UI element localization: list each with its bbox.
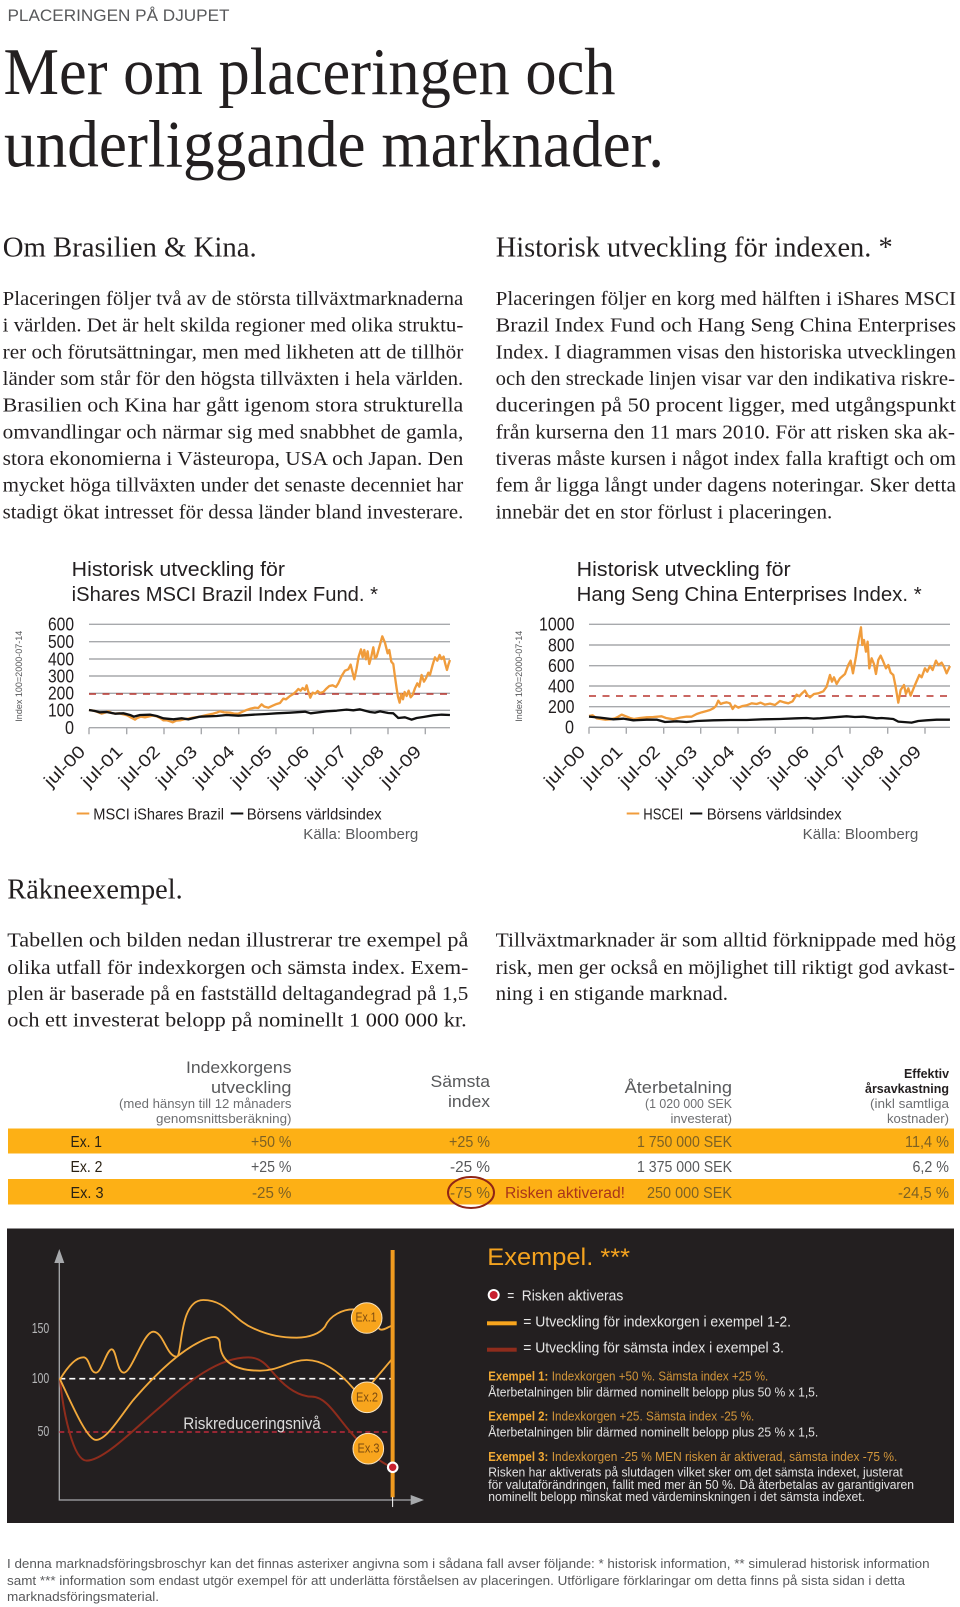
table header: Återbetalning: Återbetalning	[625, 1078, 732, 1097]
line chart: example curves	[32, 1249, 424, 1507]
y axis labels: Brazil: 500	[48, 632, 74, 652]
x axis labels: HSCEI: jul-03	[651, 741, 701, 792]
x axis labels: Brazil: jul-08	[338, 741, 388, 792]
heading: Om Brasilien & Kina: Om Brasilien & Kina.	[3, 232, 257, 264]
curves and end-of-term bar	[60, 1250, 395, 1507]
table header: Indexkorgens utveckling: (med hänsyn till 12 månaders	[119, 1097, 292, 1111]
table row: Ex. 2: Ex. 2	[70, 1159, 102, 1176]
text block: Historisk utveckling: Brazil Index Fund och Hang Seng China Enterprises	[496, 315, 956, 337]
table row: Ex. 1	[8, 1128, 954, 1154]
marker: Ex.2: Ex.2	[356, 1390, 378, 1405]
y axis labels: Brazil: 300	[48, 666, 74, 686]
marker: Ex.1	[351, 1303, 382, 1333]
kicker: PLACERINGEN PÅ DJUPET	[8, 6, 230, 25]
table header: Indexkorgens utveckling: genomsnittsberäkning)	[156, 1112, 292, 1126]
axis note: HSCEI: Index 100=2000-07-14	[514, 631, 524, 722]
x axis labels: HSCEI: jul-04	[688, 741, 739, 792]
text block: Om Brasilien & Kina: mycket höga tillväxten under det senaste decenniet har	[3, 475, 463, 497]
chart heading: HSCEI	[577, 559, 922, 606]
table header: Effektiv årsavkastning	[865, 1067, 949, 1126]
marker: Ex.1: Ex.1	[356, 1310, 376, 1325]
x axis labels: Brazil: jul-06	[263, 741, 313, 792]
table row: Ex. 2: 1 375 000 SEK	[637, 1159, 733, 1176]
table row: Ex. 3: Ex. 3	[70, 1185, 104, 1202]
text block: Exempel 1	[488, 1369, 818, 1400]
text block: Exempel 1: Återbetalningen blir därmed nominellt belopp plus 50 % x 1,5.	[488, 1385, 818, 1400]
title	[4, 35, 664, 182]
table row: Ex. 2	[70, 1159, 949, 1176]
risk reduction level line	[59, 1431, 391, 1433]
table header: Indexkorgens utveckling: Indexkorgens	[186, 1059, 292, 1077]
text block: Tillväxtmarknader	[496, 930, 956, 1005]
text block: Exempel 1: Exempel 1:	[488, 1369, 548, 1384]
line series: Börsens världsindex, HSCEI chart	[589, 716, 950, 723]
text block: Historisk utveckling: duceringen på 50 procent ligger, med utgångspunkt	[496, 395, 956, 417]
y axis labels: HSCEI: 0	[565, 718, 574, 738]
text block: Räkneexempel: plen är baserade på en fastställd deltagandegrad på 1,5	[7, 983, 468, 1005]
legend: Brazil	[77, 806, 382, 823]
line series: Börsens världsindex, Brazil chart	[89, 709, 450, 720]
x axis labels: HSCEI: jul-02	[614, 741, 664, 792]
footnote: samt *** information som endast utgör exempel för att underlätta förståelsen av placeringen. Utförligare förklaringar om detta finns på sista sidan i detta	[7, 1573, 906, 1588]
y axis labels: 150	[32, 1320, 49, 1337]
text block: Om Brasilien & Kina: Brasilien och Kina har gått igenom stora strukturella	[3, 395, 463, 417]
chart heading: Brazil	[72, 559, 378, 606]
x axis labels: HSCEI: jul-08	[838, 741, 888, 792]
text block: Räkneexempel	[7, 930, 468, 1032]
legend: risk activated: =	[507, 1288, 514, 1304]
marker: Ex.3: Ex.3	[358, 1441, 380, 1456]
text block: Historisk utveckling: från kurserna den 11 mars 2010. För att risken ska ak-	[496, 421, 955, 443]
table row: Ex. 2: 6,2 %	[912, 1159, 949, 1176]
text block: Tillväxtmarknader: Tillväxtmarknader är som alltid förknippade med hög	[496, 930, 956, 952]
text block: Exempel 3: Exempel 3:	[488, 1449, 548, 1464]
table row: Ex. 3: -75 %	[450, 1185, 490, 1202]
text block: Om Brasilien & Kina: stadigt ökat intresset för dessa länder bland investerare.	[3, 501, 463, 523]
text block: Exempel 3	[488, 1449, 914, 1504]
text block: Exempel 2: Återbetalningen blir därmed nominellt belopp plus 25 % x 1,5.	[488, 1425, 818, 1440]
table header: Återbetalning: (1 020 000 SEK	[645, 1097, 733, 1111]
chart: iShares MSCI Brazil	[14, 559, 450, 843]
table row: Ex. 3: Risken aktiverad!	[505, 1185, 625, 1202]
table row: Ex. 3: -25 %	[252, 1185, 292, 1202]
marker: Ex.2	[352, 1382, 382, 1413]
title: Mer om placeringen och	[4, 35, 616, 109]
y axis labels: 50	[38, 1423, 49, 1440]
footnote: I denna marknadsföringsbroschyr kan det finnas asterixer angivna som i sådana fall avser följande: * historisk information, ** simulerad historisk information	[7, 1556, 930, 1571]
text block: Exempel 3: Indexkorgen -25 % MEN risken är aktiverad, sämsta index -75 %.	[552, 1449, 897, 1464]
table row: Ex. 3: 250 000 SEK	[647, 1185, 733, 1202]
chart heading: Brazil: iShares MSCI Brazil Index Fund. *	[72, 584, 378, 606]
y axis labels: HSCEI: 200	[548, 697, 574, 717]
y axis labels: HSCEI: 400	[548, 676, 574, 696]
text block: Räkneexempel: olika utfall för indexkorgen och sämsta index. Exem-	[7, 957, 468, 979]
text block: Tillväxtmarknader: ning i en stigande marknad.	[496, 983, 728, 1005]
y axis labels: HSCEI	[539, 615, 574, 738]
table header: Sämsta index: index	[448, 1093, 491, 1111]
reduction level line: HSCEI	[589, 695, 950, 697]
heading: Räkneexempel: Räkneexempel.	[7, 873, 183, 905]
table row: Ex. 1: +50 %	[251, 1134, 292, 1151]
table header: Återbetalning: investerat)	[670, 1112, 732, 1126]
legend: Brazil: MSCI iShares Brazil	[93, 806, 224, 823]
text block: Om Brasilien & Kina: rer och förutsättningar, men med likheten att de tillhör	[3, 341, 463, 363]
table: examples	[8, 1059, 954, 1208]
chart: Hang Seng China Enterprises	[514, 559, 950, 843]
text block: Räkneexempel: Tabellen och bilden nedan illustrerar tre exempel på	[7, 930, 468, 952]
table row: Ex. 1: Ex. 1	[70, 1134, 102, 1151]
footnote	[7, 1556, 930, 1604]
y axis labels: Brazil	[48, 615, 74, 738]
legend: risk activated	[488, 1288, 623, 1305]
text block: Exempel 1: Indexkorgen +50 %. Sämsta index +25 %.	[552, 1369, 768, 1384]
x axis labels: Brazil	[39, 741, 425, 792]
heading: Historisk utveckling för indexen: Historisk utveckling för indexen. *	[496, 232, 893, 264]
text block: Tillväxtmarknader: risk, men ger också en möjlighet till riktigt god avkast-	[496, 957, 955, 979]
text block: Exempel 2	[488, 1409, 818, 1440]
table header: Effektiv årsavkastning: (inkl samtliga	[870, 1097, 949, 1111]
source: HSCEI: Källa: Bloomberg	[803, 826, 918, 843]
x axis labels: HSCEI: jul-01	[576, 741, 626, 792]
panel: Exempel	[7, 1228, 954, 1523]
table header: Effektiv årsavkastning: kostnader)	[887, 1112, 949, 1126]
axis note: Brazil: Index 100=2000-07-14	[14, 631, 24, 722]
text block: Om Brasilien & Kina: stora ekonomierna i Västeuropa, USA och Japan. Den	[3, 448, 463, 470]
y axis labels: 100	[32, 1370, 49, 1387]
x axis labels: Brazil: jul-04	[188, 741, 239, 792]
legend: HSCEI: Börsens världsindex	[707, 806, 842, 823]
axes	[54, 1249, 424, 1505]
x axis labels: HSCEI: jul-07	[800, 741, 850, 792]
legend: index basket: = Utveckling för indexkorgen i exempel 1-2.	[523, 1314, 791, 1331]
y axis labels: Brazil: 600	[48, 615, 74, 635]
text block: Exempel 3: för valutaförändringen, fallit med mer än 50 %. Då återbetalas av garantigivaren	[488, 1478, 914, 1492]
chart heading: HSCEI: Hang Seng China Enterprises Index. *	[577, 584, 922, 606]
line series: MSCI iShares Brazil	[89, 636, 450, 722]
x axis labels: Brazil: jul-00	[39, 741, 89, 792]
text block: Historisk utveckling: fem år ligga långt under dagens noteringar. Sker detta	[496, 475, 956, 497]
footnote: marknadsföringsmaterial.	[7, 1589, 159, 1604]
y axis labels: HSCEI: 600	[548, 656, 574, 676]
chart heading: HSCEI: Historisk utveckling för	[577, 559, 791, 581]
line series: HSCEI	[589, 627, 950, 720]
table header: Återbetalning	[625, 1078, 733, 1126]
text block: Exempel 3: nominellt belopp minskat med värdeminskningen i det sämsta indexet.	[488, 1490, 865, 1504]
source: Brazil: Källa: Bloomberg	[303, 826, 418, 843]
legend: HSCEI	[627, 806, 842, 823]
table header: Effektiv årsavkastning: årsavkastning	[865, 1082, 949, 1096]
text block: Exempel 2: Exempel 2:	[488, 1409, 548, 1424]
legend: risk activated: Risken aktiveras	[522, 1288, 623, 1305]
start level line	[59, 1378, 391, 1380]
text block: Om Brasilien & Kina: i världen. Det är helt skilda regioner med olika struktu-	[3, 315, 463, 337]
text block: Räkneexempel: och ett investerat belopp på nominellt 1 000 000 kr.	[7, 1010, 467, 1032]
y axis labels: Brazil: 0	[65, 718, 74, 738]
x axis labels: Brazil: jul-01	[76, 741, 126, 792]
x axis labels: HSCEI: jul-09	[875, 741, 925, 792]
reduction level line: Brazil	[89, 693, 450, 695]
text block: Om Brasilien & Kina	[3, 288, 463, 523]
x axis labels: Brazil: jul-07	[300, 741, 350, 792]
y axis labels: Brazil: 100	[48, 701, 74, 721]
label: Riskreduceringsnivå: Riskreduceringsnivå	[183, 1414, 321, 1433]
chart heading: Brazil: Historisk utveckling för	[72, 559, 285, 581]
table row: Ex. 2: -25 %	[450, 1159, 490, 1176]
table header: Effektiv årsavkastning: Effektiv	[904, 1067, 949, 1081]
table row: Ex. 1: 1 750 000 SEK	[637, 1134, 733, 1151]
table row: Ex. 3: -24,5 %	[898, 1185, 949, 1202]
y axis labels: HSCEI: 800	[548, 635, 574, 655]
y axis labels: HSCEI: 1000	[539, 615, 574, 635]
text block: Historisk utveckling: Placeringen följer en korg med hälften i iShares MSCI	[496, 288, 956, 310]
x axis labels: Brazil: jul-09	[375, 741, 425, 792]
table header: Indexkorgens utveckling: utveckling	[211, 1079, 292, 1097]
table header: Sämsta index: Sämsta	[430, 1073, 491, 1091]
text block: Om Brasilien & Kina: Placeringen följer två av de största tillväxtmarknaderna	[3, 288, 463, 310]
table row: Ex. 1: +25 %	[449, 1134, 490, 1151]
x axis labels: HSCEI: jul-00	[539, 741, 589, 792]
table header: Sämsta index	[430, 1073, 491, 1111]
table header: Indexkorgens utveckling	[119, 1059, 292, 1126]
text block: Historisk utveckling: innebär det en stor förlust i placeringen.	[496, 501, 832, 523]
legend: Brazil: Börsens världsindex	[247, 806, 382, 823]
text block: Historisk utveckling: tiveras måste kursen i något index falla kraftigt och om	[496, 448, 956, 470]
marker: risk activated	[387, 1462, 399, 1473]
legend: worst index: = Utveckling för sämsta index i exempel 3.	[523, 1339, 784, 1356]
table row: Ex. 2: +25 %	[251, 1159, 292, 1176]
title: underliggande marknader.	[4, 108, 664, 182]
legend: HSCEI: HSCEI	[643, 806, 683, 823]
text block: Exempel 2: Indexkorgen +25. Sämsta index -25 %.	[552, 1409, 754, 1424]
x axis labels: Brazil: jul-03	[151, 741, 201, 792]
text block: Om Brasilien & Kina: länder som står för den högsta tillväxten i hela världen.	[3, 368, 463, 390]
text block: Exempel 3: Risken har aktiverats på slutdagen vilket sker om det sämsta indexet, justerat	[488, 1466, 903, 1480]
x axis labels: Brazil: jul-05	[226, 741, 276, 792]
x axis labels: HSCEI: jul-06	[763, 741, 813, 792]
table row: Ex. 1: 11,4 %	[905, 1134, 949, 1151]
y axis labels: Brazil: 200	[48, 684, 74, 704]
x axis labels: Brazil: jul-02	[114, 741, 164, 792]
y axis labels: Brazil: 400	[48, 649, 74, 669]
x axis labels: HSCEI	[539, 741, 925, 792]
y axis labels	[32, 1320, 49, 1440]
table row: Ex. 3	[8, 1177, 954, 1208]
text block: Om Brasilien & Kina: omvandlingar och närmar sig med snabbhet de gamla,	[3, 421, 463, 443]
panel heading: Exempel: Exempel. ***	[487, 1244, 630, 1271]
x axis labels: HSCEI: jul-05	[726, 741, 776, 792]
text block: Historisk utveckling: och den streckade linjen visar var den indikativa riskre-	[496, 368, 955, 390]
marker: Ex.3	[353, 1433, 384, 1464]
text block: Historisk utveckling: Index. I diagrammen visas den historiska utvecklingen	[496, 341, 956, 363]
text block: Historisk utveckling	[496, 288, 956, 523]
